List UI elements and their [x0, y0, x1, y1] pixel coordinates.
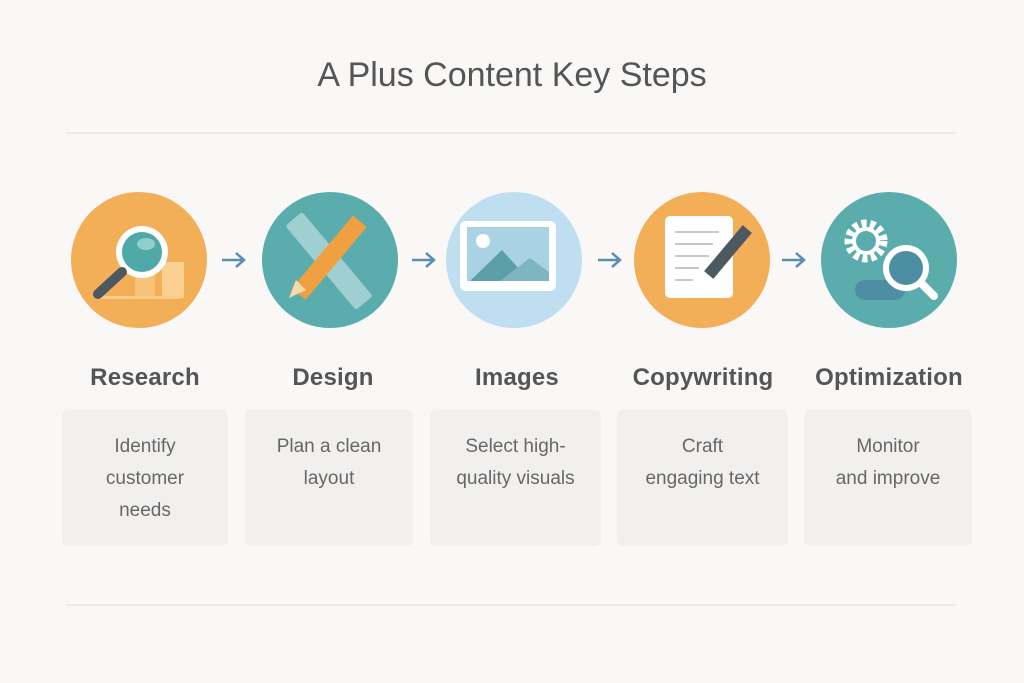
card: images: Select high-: [465, 436, 566, 457]
text: Copywriting: [633, 364, 773, 391]
arrow: [222, 253, 244, 267]
icons and arrows: [71, 192, 957, 328]
text: Design: [292, 364, 374, 391]
card: copywriting: engaging text: [645, 468, 760, 489]
card: research: needs: [119, 500, 171, 521]
card: design: layout: [304, 468, 354, 489]
card: design: [245, 410, 413, 546]
title: A Plus Content Key Steps: [317, 56, 707, 94]
card: research: customer: [106, 468, 184, 489]
icon: optimization: [821, 192, 957, 328]
card: images: quality visuals: [456, 468, 575, 489]
step titles: Research: [90, 364, 200, 391]
icon: copywriting: [634, 192, 770, 328]
icon: research: [71, 192, 207, 328]
icon: images: [446, 192, 582, 328]
card: research: Identify: [114, 436, 176, 457]
card: design: Plan a clean: [277, 436, 381, 457]
card: images: [430, 410, 601, 546]
arrow: [598, 253, 620, 267]
card: optimization: and improve: [836, 468, 940, 489]
card: copywriting: Craft: [682, 436, 723, 457]
card: copywriting: [617, 410, 788, 546]
card: optimization: [804, 410, 972, 546]
arrow: [412, 253, 434, 267]
text: Images: [475, 364, 559, 391]
card: optimization: Monitor: [856, 436, 920, 457]
text: Optimization: [815, 364, 963, 391]
arrow: [782, 253, 804, 267]
icon: design: [262, 192, 398, 328]
card: research: [62, 410, 228, 546]
